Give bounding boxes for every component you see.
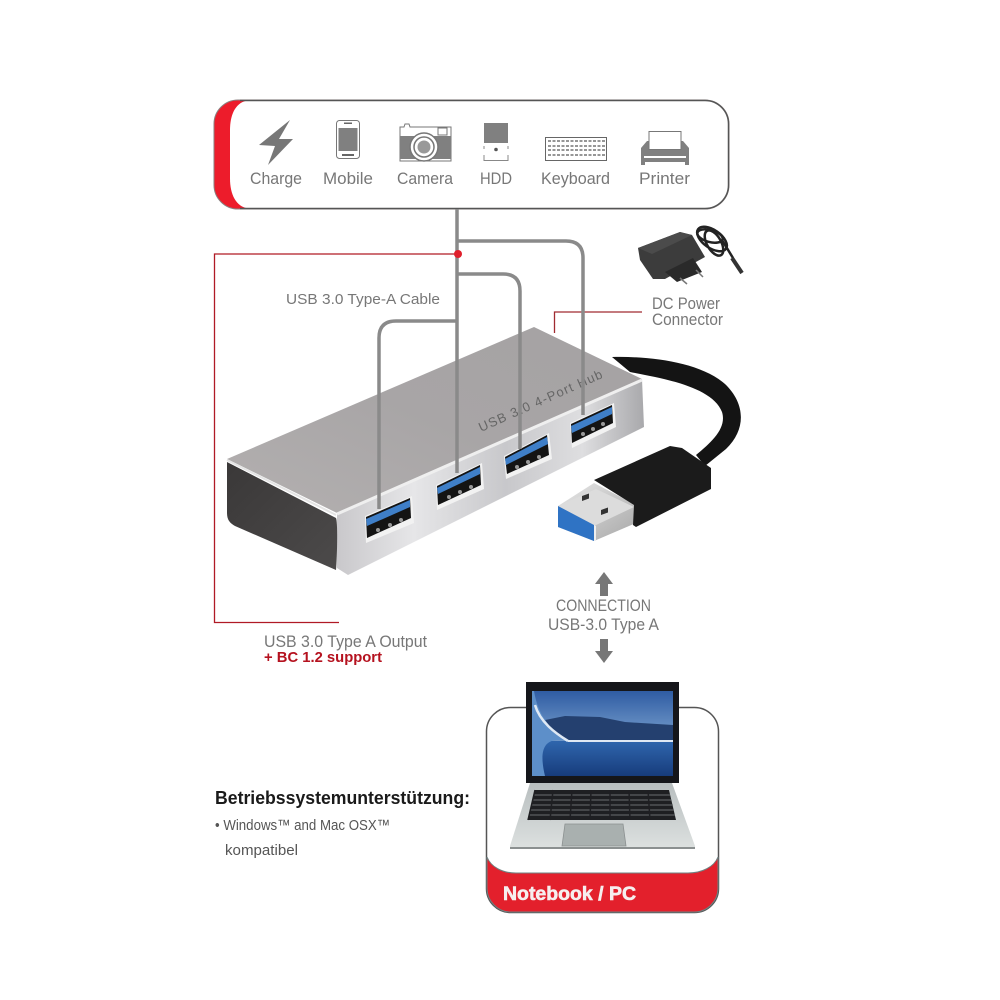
callout dot: [454, 250, 462, 258]
heading: operating system support: Betriebssystemunterstützung:: [215, 788, 470, 808]
device labels: Keyboard: [541, 169, 610, 188]
panel background with red edge: [214, 100, 729, 209]
label: usb output: [264, 632, 427, 666]
hub end cap: [227, 462, 337, 570]
text: compatibility: • Windows™ and Mac OSX™: [215, 817, 390, 834]
laptop: [510, 682, 695, 849]
arrow: down: [595, 639, 613, 663]
plug black housing: [594, 446, 711, 527]
icon: mobile: [336, 120, 360, 158]
plug blue tongue: [558, 506, 594, 541]
panel: notebook: [486, 682, 718, 912]
hub: [227, 327, 644, 575]
hub top face: [227, 327, 642, 513]
laptop touchpad: [562, 824, 626, 846]
icon: power adapter: [638, 222, 742, 284]
laptop lid: [526, 682, 679, 783]
text: compatibility: kompatibel: [225, 842, 298, 859]
label: usb output: USB 3.0 Type A Output: [264, 632, 427, 651]
laptop screen: [532, 691, 673, 776]
plug metal shell: [558, 483, 636, 541]
panel body: [486, 708, 718, 912]
port 3: [504, 433, 552, 479]
label: connection: USB-3.0 Type A: [548, 615, 660, 634]
port 2: [436, 463, 484, 510]
arrow: up: [595, 572, 613, 596]
label: dc power connector: [652, 294, 723, 329]
icon: charge: [259, 120, 293, 165]
red callout line: USB output: [214, 254, 458, 622]
device labels: Mobile: [323, 169, 373, 188]
hub front face: [337, 379, 644, 575]
label: usb output: + BC 1.2 support: [264, 649, 382, 666]
hub printed label: USB 3.0 4-Port Hub: [476, 367, 605, 435]
usb cable: [612, 357, 741, 466]
laptop keyboard: [528, 790, 676, 820]
DC connector line: [554, 312, 642, 333]
icon: camera: [400, 124, 451, 161]
branching usb cable lines: [379, 209, 583, 509]
panel: device types: [214, 100, 729, 209]
icon: printer: [641, 132, 689, 165]
usb plug: [558, 446, 711, 541]
device labels: Charge: [250, 169, 302, 188]
device labels: HDD: [480, 169, 512, 188]
label: dc power connector: Connector: [652, 310, 723, 329]
port 1: [365, 496, 414, 543]
icon: keyboard: [546, 138, 606, 160]
device labels: [250, 169, 690, 188]
label: connection: CONNECTION: [556, 596, 651, 615]
text: compatibility: [215, 817, 390, 859]
icon: hdd: [484, 123, 508, 160]
port 4: [570, 403, 616, 448]
label: dc power connector: DC Power: [652, 294, 720, 313]
laptop base: [510, 783, 695, 849]
panel caption: Notebook / PC: [503, 884, 636, 905]
label: usb cable: USB 3.0 Type-A Cable: [286, 291, 440, 308]
label: connection: [548, 596, 660, 634]
device labels: Printer: [639, 169, 690, 188]
device labels: Camera: [397, 169, 453, 188]
panel red band: [487, 857, 718, 912]
